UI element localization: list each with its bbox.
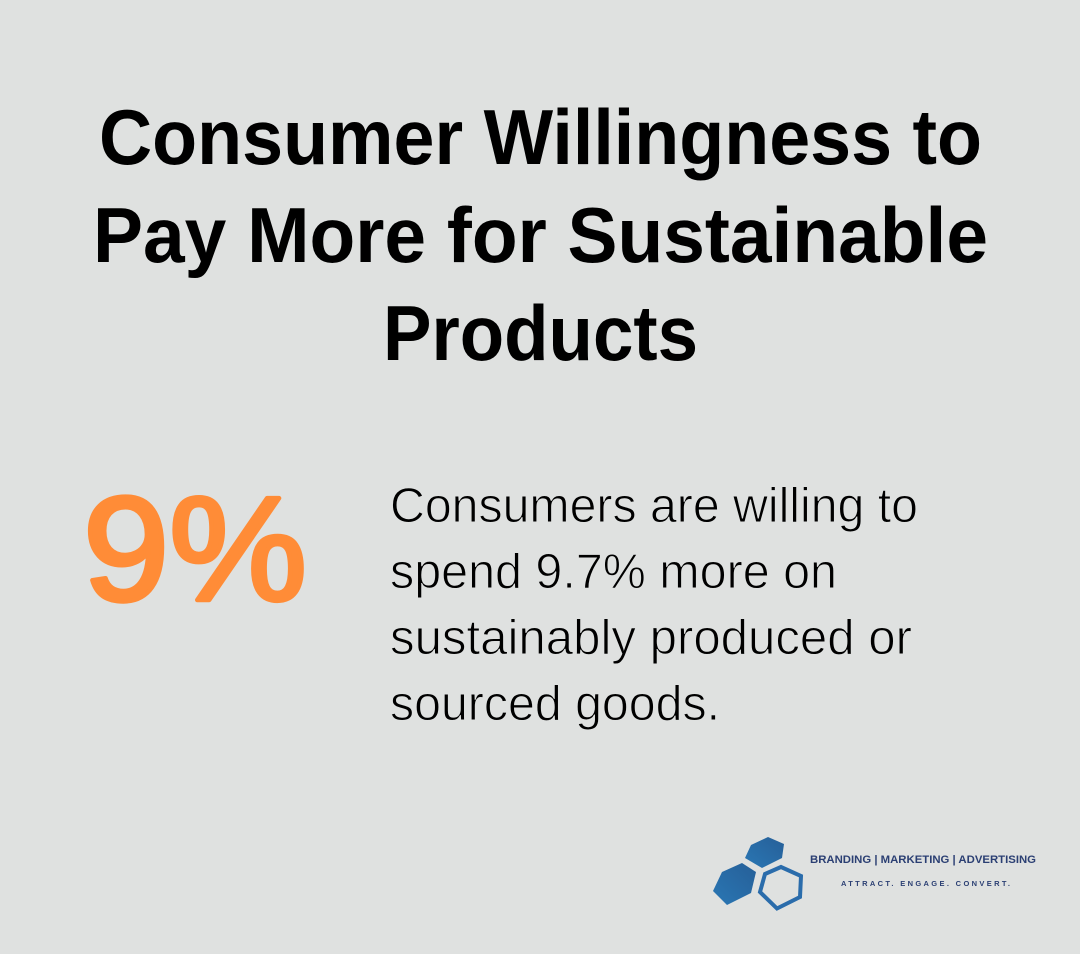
- logo: [713, 837, 1036, 908]
- big stat: 9%: 9%: [83, 467, 307, 632]
- stat description: sustainably produced or: [390, 611, 912, 665]
- icon: outlined hexagon: [760, 867, 801, 908]
- stat description: [390, 479, 918, 731]
- title: Products: [383, 289, 698, 377]
- title: Consumer Willingness to: [99, 93, 982, 181]
- stat description: spend 9.7% more on: [390, 545, 837, 599]
- stat description: sourced goods.: [390, 677, 720, 731]
- logo tagline: services: BRANDING | MARKETING | ADVERTISING: [810, 854, 1036, 866]
- icon: top filled hexagon: [745, 837, 784, 868]
- logo tagline: motto: ATTRACT. ENGAGE. CONVERT.: [841, 879, 1010, 888]
- title: [93, 93, 988, 377]
- title: Pay More for Sustainable: [93, 191, 988, 279]
- icon: left filled hexagon: [713, 863, 756, 905]
- stat description: Consumers are willing to: [390, 479, 918, 533]
